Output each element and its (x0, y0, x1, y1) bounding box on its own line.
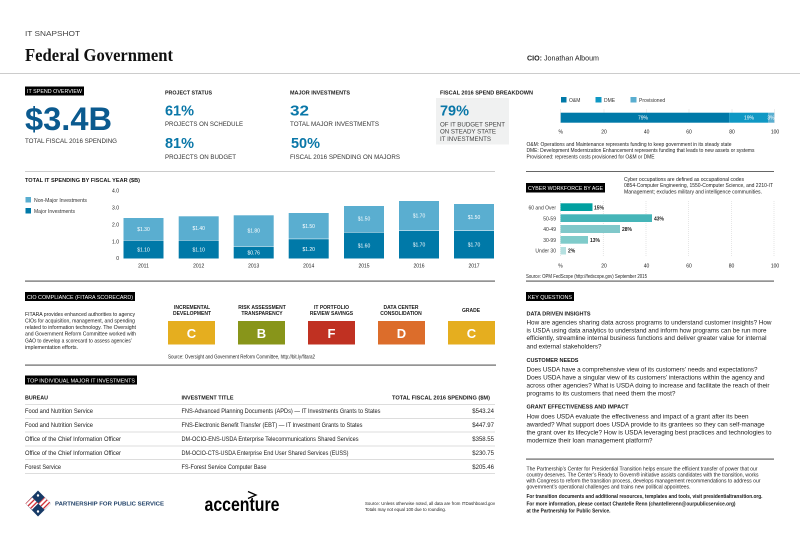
text block: spend definitions: O&M: Operations and Maintenance represents funding to keep government in its steady state (526, 142, 732, 148)
table: top individual major IT investments: TOP INDIVIDUAL MAJOR IT INVESTMENTS (27, 378, 135, 384)
panel: major investments (290, 90, 400, 161)
chart: total IT spending by fiscal year: $1.70 (413, 214, 425, 220)
text block: data source note: Totals may not equal 100 due to rounding. (365, 507, 446, 513)
header: CIO: Jonathan Alboum (527, 56, 599, 63)
chart: total IT spending by fiscal year: $1.20 (302, 247, 315, 253)
chart: spend breakdown stacked bar (558, 97, 779, 136)
chart: spend breakdown stacked bar: 100 (771, 130, 779, 136)
chart: cyber workforce by age: 50-59 (543, 216, 556, 222)
panel: CIO compliance: CIO COMPLIANCE (FITARA SCORECARD) (27, 295, 133, 301)
panel: key questions: awarded? What support does USDA provide to its grantees so they can self-manage (526, 421, 765, 428)
panel: CIO compliance: CONSOLIDATION (380, 311, 422, 317)
text block: about the Partnership: country deserves. The Center’s Ready to Govern® initiative assists candidates with the transition, works (526, 472, 759, 478)
panel: fiscal 2016 spend breakdown: 79% (440, 102, 469, 119)
chart: total IT spending by fiscal year: $1.30 (137, 227, 150, 233)
chart: spend breakdown stacked bar: 40 (644, 130, 650, 136)
panel: major investments: MAJOR INVESTMENTS (290, 90, 350, 96)
panel: CIO compliance: GRADE (462, 308, 481, 314)
panel: IT spend overview: TOTAL FISCAL 2016 SPENDING (25, 139, 117, 145)
chart: spend breakdown stacked bar: 79% (638, 116, 649, 122)
chart: total IT spending by fiscal year: 3.0 (112, 206, 119, 212)
panel: CIO compliance: REVIEW SAVINGS (310, 311, 354, 317)
panel: key questions: is USDA using data analytics to understand and inform how programs can be run more (526, 327, 767, 334)
chart: cyber workforce by age: CYBER WORKFORCE BY AGE (528, 186, 603, 192)
panel: key questions: Does USDA have a comprehensive view of its customers’ needs and expectations? (526, 366, 758, 373)
panel: key questions: CUSTOMER NEEDS (526, 358, 579, 364)
chart: total IT spending by fiscal year: 2014 (303, 264, 314, 270)
chart: spend breakdown stacked bar: 19% (744, 116, 755, 122)
panel: IT spend overview: $3.4B (25, 101, 112, 137)
panel: major investments: TOTAL MAJOR INVESTMENTS (290, 122, 379, 128)
chart: total IT spending by fiscal year: $1.70 (413, 242, 425, 248)
panel: CIO compliance (25, 292, 495, 360)
table: top individual major IT investments: $447.97 (472, 423, 495, 429)
panel: project status: PROJECTS ON BUDGET (165, 155, 236, 161)
chart: total IT spending by fiscal year: $1.70 (468, 242, 480, 248)
panel: IT spend overview (25, 86, 117, 145)
panel: key questions: modernize their loan management platform? (526, 437, 653, 444)
text block: FITARA description: CIOs for acquisition, management, and spending (25, 318, 135, 324)
chart: spend breakdown stacked bar: 20 (601, 130, 607, 136)
chart: cyber workforce by age: 100 (771, 264, 779, 270)
chart: cyber workforce by age: 60 and Over (528, 206, 556, 212)
header: Federal Government (25, 45, 173, 65)
table: top individual major IT investments: DM-OCIO-ENS-USDA Enterprise Telecommunications Shared Services (182, 437, 358, 443)
panel: CIO compliance: TRANSPARENCY (241, 311, 283, 317)
table: top individual major IT investments: FNS-Electronic Benefit Transfer (EBT) — IT Investment Grants to States (182, 423, 362, 429)
table: top individual major IT investments: Food and Nutrition Service (25, 423, 94, 429)
panel: fiscal 2016 spend breakdown: ON STEADY STATE (440, 128, 496, 136)
text block: FITARA description (25, 312, 136, 351)
panel: project status: PROJECT STATUS (165, 90, 212, 96)
chart: total IT spending by fiscal year: 1.0 (112, 240, 119, 246)
chart: cyber workforce by age: 20 (601, 264, 607, 270)
panel: key questions: DATA DRIVEN INSIGHTS (526, 311, 591, 317)
text block: data source note: Source: Unless otherwise noted, all data are from ITDashboard.gov (365, 501, 496, 507)
chart: total IT spending by fiscal year: TOTAL IT SPENDING BY FISCAL YEAR ($B) (25, 178, 140, 184)
chart: total IT spending by fiscal year (25, 178, 494, 270)
panel: key questions: KEY QUESTIONS (528, 295, 572, 301)
table: top individual major IT investments: BUREAU (25, 395, 48, 401)
chart: total IT spending by fiscal year: 2015 (358, 264, 370, 270)
chart: spend breakdown stacked bar: O&M (569, 98, 580, 104)
panel: project status: 81% (165, 135, 194, 152)
chart: cyber workforce by age: 28% (622, 227, 633, 233)
chart: total IT spending by fiscal year: $1.50 (302, 224, 315, 230)
chart: total IT spending by fiscal year: Non-Major Investments (34, 198, 88, 204)
panel: CIO compliance: DATA CENTER (384, 305, 419, 311)
text block: FITARA description: related to information technology. The Oversight (25, 325, 136, 331)
chart: cyber workforce by age: 40 (644, 264, 649, 270)
panel: CIO compliance: B (257, 326, 266, 341)
panel: IT spend overview: IT SPEND OVERVIEW (27, 89, 83, 95)
table: top individual major IT investments: $358.55 (472, 437, 495, 443)
chart: cyber workforce by age: 15% (594, 206, 605, 212)
panel: CIO compliance: DEVELOPMENT (173, 311, 211, 317)
panel: key questions (526, 292, 772, 444)
text block: spend definitions: Provisioned: represents costs provisioned for O&M or DME (526, 154, 655, 160)
panel: major investments: 32 (290, 102, 309, 119)
panel: key questions: the grant over its lifecycle? How is USDA leveraging best practices and technologies to (526, 429, 772, 436)
panel: CIO compliance: C (467, 326, 477, 341)
table: top individual major IT investments: Office of the Chief Information Officer (25, 451, 121, 457)
text block: about the Partnership: For more information, please contact Chantelle Renn (chantellerenn@ourpublicservice.org) (526, 502, 736, 508)
chart: total IT spending by fiscal year: 2016 (413, 264, 425, 270)
panel: CIO compliance: RISK ASSESSMENT (238, 305, 286, 311)
text block: FITARA description: FITARA provides enhanced authorities to agency (25, 312, 135, 318)
panel: CIO compliance: Source: Oversight and Government Reform Committee, http://bit.ly/fitara2 (168, 354, 315, 360)
chart: total IT spending by fiscal year: $1.60 (358, 244, 370, 250)
chart: cyber workforce by age: 40-49 (543, 227, 556, 233)
chart: cyber workforce by age: Cyber occupations are defined as occupational codes (624, 177, 745, 183)
panel: CIO compliance: D (397, 326, 406, 341)
logo: Partnership for Public Service: PARTNERSHIP FOR PUBLIC SERVICE (55, 501, 164, 507)
panel: key questions: How are agencies sharing data across programs to understand customer insights? How (526, 319, 772, 326)
table: top individual major IT investments: Forest Service (25, 465, 62, 471)
chart: spend breakdown stacked bar: % (558, 130, 563, 136)
table: top individual major IT investments: Food and Nutrition Service (25, 409, 94, 415)
text block: about the Partnership: government’s operational challenges and trains new political appointees. (526, 485, 690, 491)
chart: cyber workforce by age: Management; excludes military and intelligence communities. (624, 190, 762, 196)
chart: cyber workforce by age: 13% (590, 238, 601, 244)
panel: key questions: across other agencies? What is USDA doing to increase and facilitate the reach of their (526, 382, 770, 389)
chart: cyber workforce by age (526, 177, 779, 280)
panel: fiscal 2016 spend breakdown: OF IT BUDGET SPENT (440, 122, 505, 128)
header (25, 29, 599, 65)
chart: cyber workforce by age: % (558, 264, 563, 270)
text block: FITARA description: implementation efforts. (25, 345, 78, 351)
panel: key questions: and external stakeholders? (526, 343, 602, 350)
panel: major investments: FISCAL 2016 SPENDING ON MAJORS (290, 155, 400, 161)
table: top individual major IT investments: FNS-Advanced Planning Documents (APDs) — IT Investments Grants to States (182, 409, 380, 415)
text block: spend definitions: DME: Development Modernization Enhancement represents funding that leads to new assets or systems (526, 148, 755, 154)
chart: cyber workforce by age: 80 (729, 264, 734, 270)
chart: total IT spending by fiscal year: $1.80 (247, 228, 260, 234)
header: IT SNAPSHOT (25, 29, 80, 38)
chart: total IT spending by fiscal year: 2012 (193, 264, 204, 270)
panel: project status: PROJECTS ON SCHEDULE (165, 122, 243, 128)
panel: key questions: How does USDA evaluate the effectiveness and impact of a grant after its been (526, 413, 749, 420)
chart: total IT spending by fiscal year: $1.50 (358, 216, 370, 222)
table: top individual major IT investments: $205.46 (472, 465, 495, 471)
panel: key questions: GRANT EFFECTIVENESS AND IMPACT (526, 405, 629, 411)
chart: total IT spending by fiscal year: 2.0 (112, 222, 119, 228)
panel: fiscal 2016 spend breakdown: IT INVESTMENTS (440, 136, 491, 143)
chart: cyber workforce by age: 30-99 (543, 238, 556, 244)
chart: total IT spending by fiscal year: Major Investments (34, 209, 75, 215)
chart: total IT spending by fiscal year: $0.76 (247, 250, 260, 256)
panel: CIO compliance: INCREMENTAL (174, 305, 210, 311)
text block: about the Partnership: with Congress to reform the transition process, develops management recommendations to address our (526, 479, 761, 485)
text block: FITARA description: and Government Reform Committee worked with (25, 331, 136, 337)
panel: major investments: 50% (291, 135, 320, 152)
panel: CIO compliance: F (328, 326, 336, 341)
text block: about the Partnership: For transition documents and additional resources, templates and tools, visit presidentialtransition.org. (526, 494, 763, 500)
panel: fiscal 2016 spend breakdown: FISCAL 2016 SPEND BREAKDOWN (440, 90, 533, 96)
chart: spend breakdown stacked bar: Provisioned (639, 98, 665, 104)
chart: total IT spending by fiscal year: 2011 (138, 264, 149, 270)
table: top individual major IT investments: $543.24 (472, 409, 495, 415)
chart: total IT spending by fiscal year: $1.40 (192, 226, 205, 232)
chart: total IT spending by fiscal year: $1.10 (192, 248, 205, 254)
text block: data source note (365, 501, 496, 513)
chart: cyber workforce by age: 60 (686, 264, 692, 270)
panel: project status: 61% (165, 102, 194, 119)
text block: about the Partnership: The Partnership’s Center for Presidential Transition helps ensure the efficient transfer of power that our (526, 466, 758, 472)
table: top individual major IT investments: $230.75 (472, 451, 495, 457)
chart: total IT spending by fiscal year: 2017 (468, 264, 480, 270)
table: top individual major IT investments: DM-OCIO-CTS-USDA Enterprise End User Shared Services (EUSS) (182, 451, 348, 457)
chart: spend breakdown stacked bar: DME (604, 98, 616, 104)
chart: spend breakdown stacked bar: 3% (767, 116, 775, 122)
logo: Accenture: accenture (204, 495, 280, 516)
chart: total IT spending by fiscal year: $1.50 (468, 215, 480, 221)
table: top individual major IT investments: FS-Forest Service Computer Base (182, 465, 267, 471)
chart: total IT spending by fiscal year: 0 (116, 256, 119, 262)
chart: total IT spending by fiscal year: $1.10 (137, 248, 150, 254)
table: top individual major IT investments: Office of the Chief Information Officer (25, 437, 121, 443)
chart: spend breakdown stacked bar: 80 (729, 130, 735, 136)
panel: key questions: programs to its customers that need them the most? (526, 390, 676, 397)
panel: key questions: Does USDA have a singular view of its customers’ interactions within the agency and (526, 374, 765, 381)
text block: FITARA description: GAO to develop a scorecard to assess agencies’ (25, 338, 132, 344)
panel: fiscal 2016 spend breakdown (436, 90, 533, 144)
chart: cyber workforce by age: 2% (568, 248, 576, 254)
chart: total IT spending by fiscal year: 2013 (248, 264, 259, 270)
chart: total IT spending by fiscal year: 4.0 (112, 188, 119, 194)
chart: cyber workforce by age: 0854-Computer Engineering, 1550-Computer Science, and 2210-IT (624, 183, 773, 189)
chart: cyber workforce by age: Under 30 (535, 248, 556, 254)
panel: CIO compliance: C (187, 326, 197, 341)
chart: cyber workforce by age: 43% (654, 216, 665, 222)
text block: about the Partnership: at the Partnership for Public Service. (526, 508, 611, 514)
chart: spend breakdown stacked bar: 60 (686, 130, 692, 136)
text block: about the Partnership (526, 466, 763, 514)
text block: spend definitions (526, 142, 755, 160)
panel: CIO compliance: IT PORTFOLIO (314, 305, 349, 311)
panel: key questions: efficiently, streamline internal business functions and deliver greater value for internal (526, 335, 767, 342)
panel: project status (165, 90, 243, 161)
logo: Partnership for Public Service (25, 490, 164, 516)
table: top individual major IT investments: INVESTMENT TITLE (182, 395, 234, 401)
table: top individual major IT investments: TOTAL FISCAL 2016 SPENDING ($M) (392, 395, 490, 401)
table: top individual major IT investments (25, 376, 495, 474)
chart: cyber workforce by age: Source: OPM FedScope (http://fedscope.gov) September 2015 (526, 274, 647, 280)
